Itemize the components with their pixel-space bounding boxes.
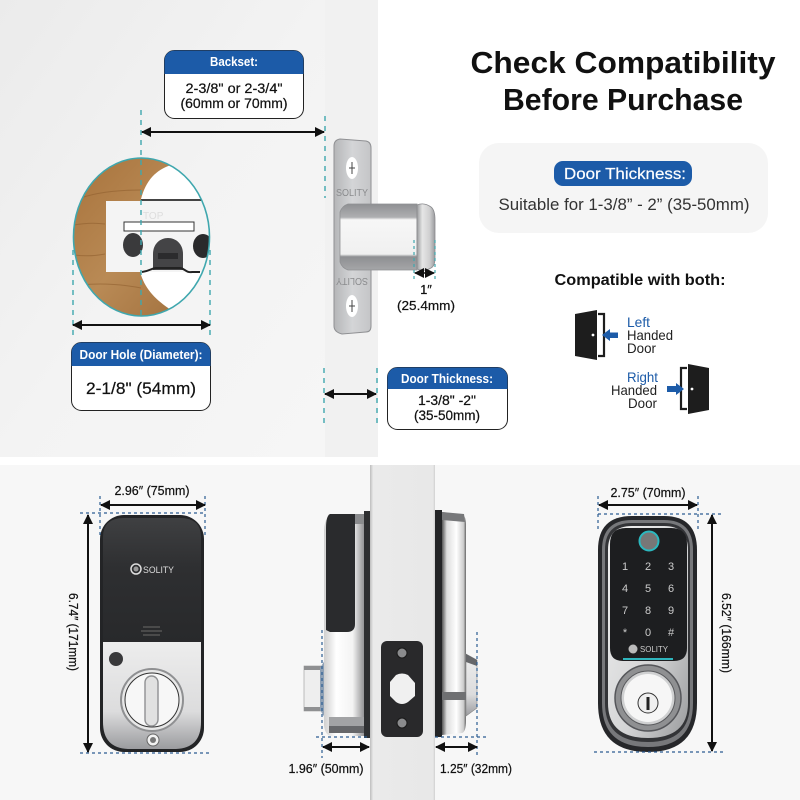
door thickness pill [554,161,692,186]
measurement: keypad height: 6.52″ (166mm) [719,593,734,673]
keypad screen: * [623,627,628,639]
measurement: door thickness [324,368,377,424]
keypad screen: 6 [668,583,674,595]
callout: door hole diameter [72,342,210,410]
keypad screen: 4 [622,583,628,595]
measurement: back view width [100,483,205,536]
latch face plate [334,139,371,334]
title: Check Compatibility [470,45,776,80]
label: right handed door [611,369,658,411]
lock: back view: SOLITY [143,565,174,575]
title [470,45,776,117]
measurement: keypad width: 2.75″ (70mm) [610,485,686,500]
callout: backset: 2-3/8" or 2-3/4" [186,81,283,96]
keypad screen: 0 [645,627,651,639]
measurement: bolt 1 inch: (25.4mm) [397,298,455,313]
callout: backset [164,50,304,118]
keypad screen [610,528,687,661]
measurement: bolt 1 inch [397,240,455,313]
callout: backset: Backset: [210,54,258,69]
door section [370,465,435,800]
bolt body [340,204,417,270]
latch face plate: SOLITY [336,188,368,199]
callout: door thickness [388,368,508,430]
callout: door hole diameter: Door Hole (Diameter): [80,347,202,362]
measurement: back view height [66,513,211,753]
icon: right handed door [667,364,709,414]
icon: left handed door [575,310,618,360]
keypad screen: 8 [645,605,651,617]
keypad screen: 5 [645,583,651,595]
keypad screen: 9 [668,605,674,617]
lock: back view [100,515,204,752]
callout: backset: (60mm or 70mm) [180,96,288,111]
latch bolt [334,139,435,334]
heading: compatible with both: Compatible with both: [554,272,726,289]
callout: door thickness: (35-50mm) [414,408,480,423]
measurement: keypad width [598,485,698,530]
keypad screen: # [668,627,675,639]
measurement: bolt 1 inch: 1″ [420,282,432,297]
bottom panel background [0,465,800,800]
callout: door hole diameter: 2-1/8" (54mm) [86,379,196,398]
label: right handed door: Right [627,369,658,385]
latch face plate: SOLITY [336,275,368,286]
label: left handed door: Door [627,340,656,356]
keypad screen: SOLITY [640,645,669,654]
strike plate [381,641,423,737]
label: left handed door [627,314,673,356]
measurement: door hole [73,250,210,338]
measurement: keypad height [594,514,734,752]
measurement: right depth: 1.25″ (32mm) [440,761,512,776]
keypad screen: 2 [645,561,651,573]
panel: door thickness summary [479,143,768,233]
label: right handed door: Door [628,395,657,411]
title: Before Purchase [503,82,743,117]
icon: door hole cutaway [74,158,216,316]
icon: door hole cutaway: TOP [143,211,164,222]
measurement: left depth: 1.96″ (50mm) [288,761,364,776]
label: left handed door: Left [627,314,650,330]
lock: side view right [435,510,477,737]
lock: side view left [304,511,370,738]
measurement: back view width: 2.96″ (75mm) [114,483,190,498]
key cylinder [615,665,681,731]
measurement: back view height: 6.74″ (171mm) [66,593,81,671]
door edge [325,0,378,457]
lock: keypad front view [598,516,697,752]
label: left handed door: Handed [627,327,673,343]
keypad screen: 1 [622,561,628,573]
door thickness pill: Door Thickness: [564,166,686,183]
keypad screen: 3 [668,561,674,573]
top background: wall [0,0,326,457]
label: right handed door: Handed [611,382,657,398]
callout: door thickness: 1-3/8" -2" [418,393,476,408]
bolt end [417,204,435,270]
door thickness text: Suitable for 1-3/8” - 2” (35-50mm) [498,196,750,214]
callout: door thickness: Door Thickness: [401,371,493,386]
keypad screen: 7 [622,605,628,617]
measurement: backset [141,110,325,320]
